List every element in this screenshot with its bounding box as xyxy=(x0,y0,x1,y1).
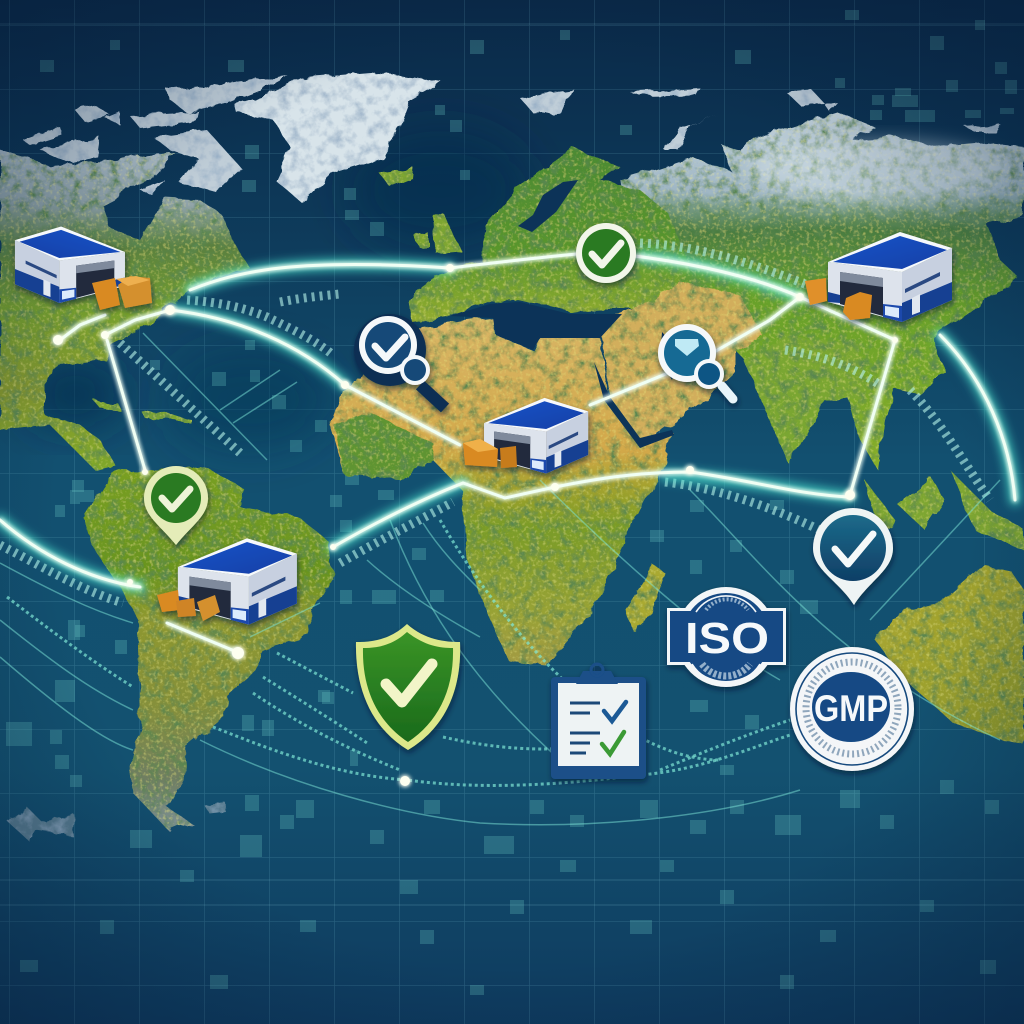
icon: green shield xyxy=(356,624,460,750)
Antarctic fragments xyxy=(8,802,226,842)
thin route lines xyxy=(0,333,1000,825)
comb bands along routes xyxy=(0,243,990,603)
icon: magnifier shield xyxy=(658,324,733,399)
continent: Australia xyxy=(875,565,1024,745)
continent: North America xyxy=(0,150,250,470)
warehouse: North America xyxy=(15,226,152,310)
badge text: GMP: GMP xyxy=(814,688,888,729)
icon: location pin South America xyxy=(144,466,208,545)
continent: Europe xyxy=(408,148,690,322)
islands: Indonesia, Caribbean, Iceland, Britain xyxy=(93,167,1024,550)
continent: Asia xyxy=(620,112,1024,470)
dashed shipping routes xyxy=(7,520,790,785)
network route halo xyxy=(0,256,1015,587)
icon: magnifier check xyxy=(354,314,445,408)
badge text: ISO: ISO xyxy=(685,614,769,663)
continent: West Africa green xyxy=(334,412,435,480)
map of continents xyxy=(0,72,1024,842)
continent: Madagascar xyxy=(626,566,664,630)
warehouse: Asia xyxy=(805,232,952,322)
continent: South America xyxy=(83,467,333,832)
warehouse: Africa xyxy=(463,398,588,473)
continent: Africa xyxy=(330,317,673,665)
seas xyxy=(450,180,680,448)
continent: India xyxy=(745,335,865,465)
cloud over Siberia xyxy=(750,138,1010,202)
icon: location pin Indian Ocean xyxy=(813,508,893,605)
glowing network routes xyxy=(0,252,1015,652)
continent: Greenland and arctic islands xyxy=(23,72,1000,203)
badge: GMP xyxy=(790,647,914,771)
warehouse: South America xyxy=(157,538,297,625)
continent: Arabia and Iran xyxy=(600,282,762,443)
badge: ISO xyxy=(667,587,786,687)
icon: clipboard checklist xyxy=(551,664,646,779)
icon: check badge Europe xyxy=(576,223,636,283)
glowing network nodes xyxy=(53,264,898,786)
